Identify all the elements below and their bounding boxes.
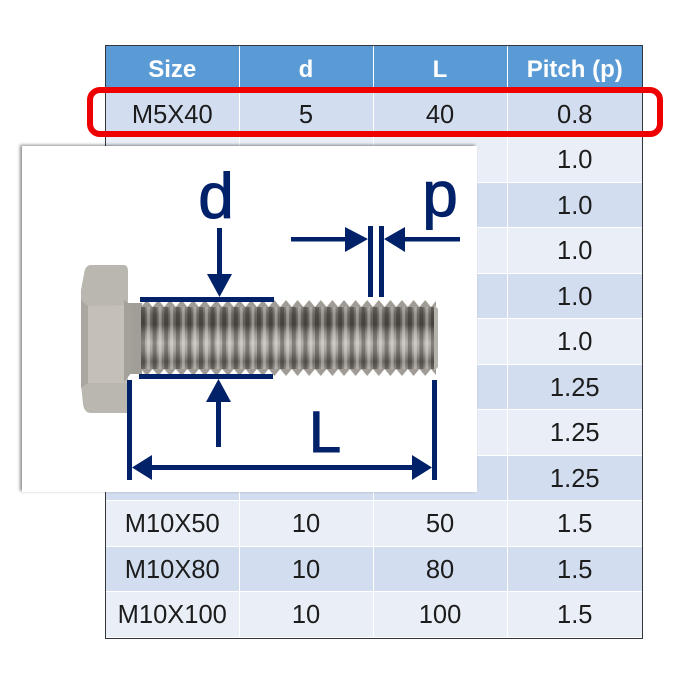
bolt bbox=[81, 265, 438, 413]
bolt head bbox=[81, 265, 132, 413]
L label: L bbox=[309, 400, 341, 465]
size table: 1.5 bbox=[557, 510, 592, 538]
size table bbox=[105, 45, 643, 638]
size table: Size bbox=[148, 56, 196, 83]
bolt shaft bbox=[128, 303, 438, 374]
size table: 1.5 bbox=[557, 601, 592, 629]
size table: 40 bbox=[426, 100, 454, 128]
red highlight around M5X40 row bbox=[87, 87, 663, 137]
size table: 1.0 bbox=[557, 237, 592, 265]
size table: M10X100 bbox=[118, 601, 227, 629]
L arrows bbox=[127, 380, 437, 480]
size table: M10X80 bbox=[125, 556, 220, 584]
size table: 1.0 bbox=[557, 192, 592, 220]
size table: M5X40 bbox=[132, 100, 213, 128]
size table: 80 bbox=[426, 556, 454, 584]
L dimension bbox=[127, 380, 437, 480]
size table: 5 bbox=[299, 100, 313, 128]
size table: 10 bbox=[292, 510, 320, 538]
size table: 10 bbox=[292, 601, 320, 629]
size table: 100 bbox=[419, 601, 461, 629]
size table: M10X50 bbox=[125, 510, 220, 538]
d label: d bbox=[198, 160, 234, 232]
size table: L bbox=[433, 56, 447, 83]
size table: 1.0 bbox=[557, 282, 592, 310]
bolt photo panel bbox=[22, 146, 477, 492]
d bottom arrow bbox=[139, 374, 273, 447]
p dimension bbox=[291, 158, 460, 297]
size table: 0.8 bbox=[557, 100, 592, 128]
d top arrow bbox=[140, 228, 274, 302]
size table: 1.0 bbox=[557, 146, 592, 174]
size table: 10 bbox=[292, 556, 320, 584]
size table: 1.25 bbox=[550, 464, 600, 492]
p arrows bbox=[291, 226, 460, 297]
size table: 1.25 bbox=[550, 374, 600, 402]
size table: d bbox=[299, 56, 313, 83]
p label: p bbox=[422, 158, 458, 230]
size table: 50 bbox=[426, 510, 454, 538]
d dimension bbox=[139, 160, 274, 447]
size table: 1.5 bbox=[557, 556, 592, 584]
size table: 1.0 bbox=[557, 328, 592, 356]
size table: Pitch (p) bbox=[527, 56, 623, 83]
size table: 1.25 bbox=[550, 419, 600, 447]
bolt thread teeth bbox=[141, 300, 436, 376]
